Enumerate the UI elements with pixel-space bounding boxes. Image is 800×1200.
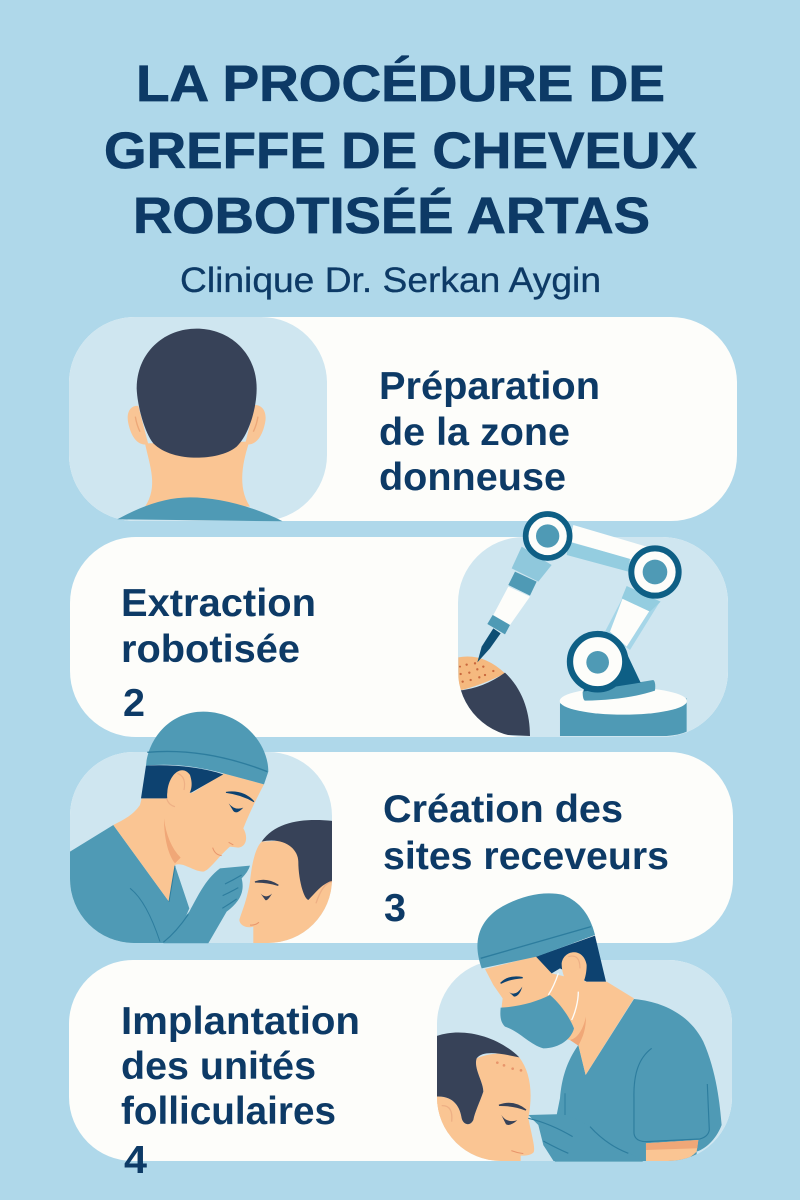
image panel: step 4 [437,960,732,1161]
text: step 2 label: robotisée [121,628,300,671]
text: step 4 label: Implantation [121,1000,360,1043]
panel: step 1 preparation [69,317,737,521]
surgeon cap [477,893,595,968]
text: step 1 label [379,365,600,499]
surgeon hair [536,936,606,982]
surgeon ear [167,770,192,806]
text: step 2 label: 2 [123,682,145,725]
text: step 1 label: donneuse [379,456,566,499]
subtitle: Clinique Dr. Serkan Aygin [180,261,601,300]
tool head [512,547,552,582]
text: step 4 label: folliculaires [121,1090,336,1133]
arm link lower [605,590,660,650]
surgeon hair [141,765,223,798]
text: step 3 label: 3 [384,887,406,930]
base cylinder [560,698,687,736]
image panel: step 2 [458,537,728,737]
surgical mask [500,995,574,1048]
panel: step 4 implantation [69,893,732,1182]
surgeon glove [163,866,250,943]
image panel: step 1 [69,317,327,521]
joints [526,514,570,558]
mask straps [548,973,578,1020]
title: LA PROCÉDURE DE [136,55,665,112]
title [104,55,697,244]
text: step 4 label: 4 [124,1139,147,1182]
icon: scalp being treated [458,656,530,736]
icon: robotic arm [477,514,687,736]
glove and tool [528,1114,643,1162]
surgeon ear [562,952,587,990]
surgeon scrubs neck edge [130,866,175,942]
text: step 1 label: Préparation [379,365,600,408]
surgeon brow and eye [501,977,523,983]
text: step 3 label [383,788,669,930]
surgeon eye and brow [226,792,254,802]
icon: patient profile [70,820,333,945]
text: step 2 label: Extraction [121,582,316,625]
icon: surgeon with mask [477,893,643,1162]
text: step 1 label: de la zone [379,411,570,454]
image panel: step 3 [70,752,332,943]
arm link upper [567,542,630,572]
icon: surgeon with cap [113,712,268,943]
text: step 2 label [121,582,316,725]
title: GREFFE DE CHEVEUX [104,122,697,179]
text: step 4 label [121,1000,360,1182]
text: step 3 label: Création des [383,788,623,831]
text: step 4 label: des unités [121,1045,316,1088]
panel: step 3 recipient sites [70,712,733,945]
title: ROBOTISÉÉ ARTAS [133,187,650,244]
text: step 3 label: sites receveurs [383,835,669,878]
icon: patient and surgeon body [435,999,722,1163]
surgeon face [485,956,634,1075]
icon: back of head [117,329,283,521]
surgeon cap [146,712,268,784]
panel: step 2 extraction [70,514,728,737]
surgeon face [113,773,264,902]
